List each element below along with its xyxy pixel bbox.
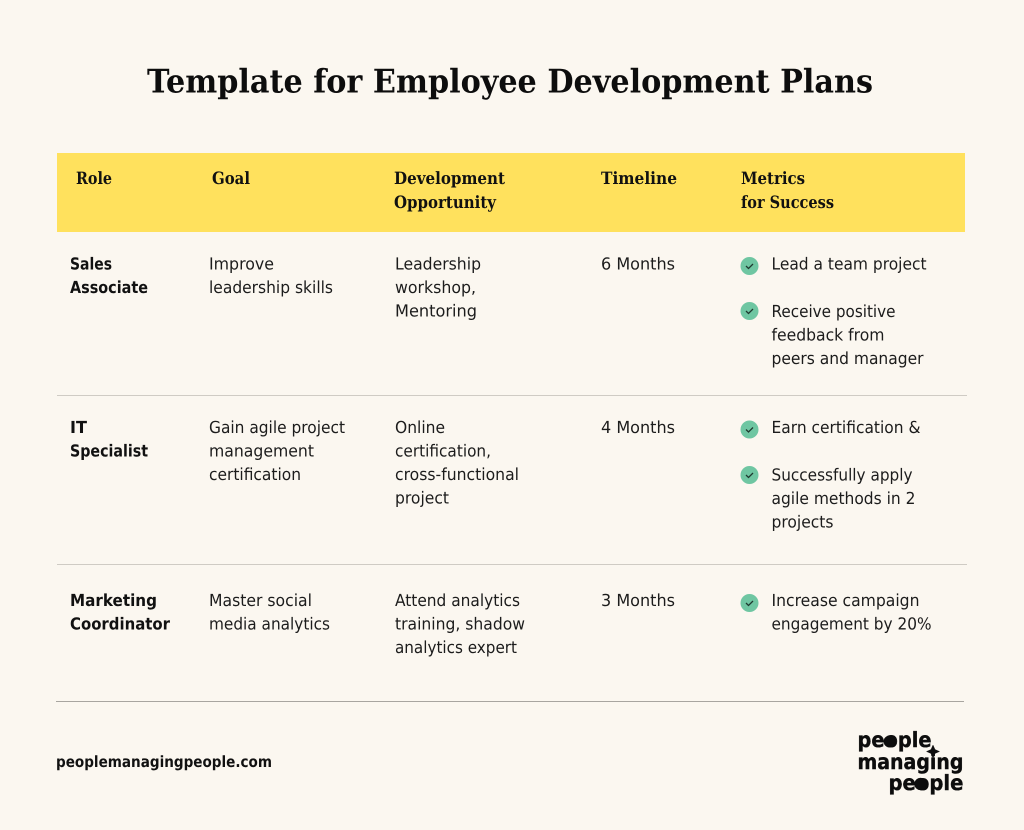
table header band: Timeline — [601, 169, 677, 189]
row: IT Specialist: 4 Months — [601, 418, 675, 437]
row: IT Specialist: Online — [395, 418, 445, 437]
row: IT Specialist: projects — [772, 512, 834, 532]
row: Sales Associate: feedback from — [772, 326, 884, 344]
title: Template for Employee Development Plans — [147, 62, 873, 100]
row: Sales Associate: 6 Months — [601, 254, 675, 274]
row: Marketing Coordinator: Master social — [209, 591, 312, 610]
row: IT Specialist: cross-functional — [395, 465, 519, 484]
row: Sales Associate: Lead a team project — [772, 254, 927, 274]
icon: check — [740, 302, 758, 320]
row: Sales Associate: Associate — [70, 278, 148, 297]
logo: people — [888, 771, 964, 795]
row: IT Specialist: Successfully apply — [772, 466, 913, 484]
row: Sales Associate: Improve — [209, 254, 274, 274]
row: Marketing Coordinator: engagement by 20% — [772, 614, 932, 634]
row: Marketing Coordinator: Coordinator — [70, 614, 171, 634]
row: IT Specialist: management — [209, 442, 314, 460]
table header band: Goal — [212, 169, 250, 189]
row: Sales Associate: workshop, — [395, 278, 476, 297]
row: IT Specialist: agile methods in 2 — [772, 489, 916, 508]
row: Marketing Coordinator: Marketing — [70, 591, 157, 610]
row: IT Specialist: certification, — [395, 442, 491, 460]
row: Sales Associate: Leadership — [395, 254, 481, 274]
row: IT Specialist: certification — [209, 465, 301, 484]
row: IT Specialist: IT — [70, 418, 88, 437]
row: Marketing Coordinator — [70, 591, 932, 657]
table header band: Opportunity — [394, 193, 497, 213]
row: Sales Associate: leadership skills — [209, 278, 333, 297]
logo — [858, 728, 964, 795]
row: Marketing Coordinator: media analytics — [209, 614, 330, 634]
icon: check — [740, 594, 758, 612]
row: Sales Associate: Receive positive — [772, 302, 896, 321]
logo: managing — [858, 750, 964, 774]
row: Marketing Coordinator: analytics expert — [395, 638, 517, 657]
row: IT Specialist: Earn certification & — [772, 418, 921, 437]
row: Sales Associate: Sales — [70, 254, 112, 274]
icon: check — [740, 257, 758, 275]
row: Marketing Coordinator: Attend analytics — [395, 591, 520, 610]
row: Sales Associate: peers and manager — [772, 349, 924, 368]
table header band: Metrics — [741, 169, 805, 189]
row: Marketing Coordinator: training, shadow — [395, 614, 525, 634]
table header band: for Success — [741, 193, 834, 213]
table header band: Role — [76, 169, 112, 189]
row: IT Specialist: Gain agile project — [209, 418, 345, 437]
row: Marketing Coordinator: Increase campaign — [772, 591, 920, 610]
icon: check — [740, 466, 758, 484]
row: Sales Associate: Mentoring — [395, 302, 477, 320]
row: IT Specialist: Specialist — [70, 442, 148, 460]
logo: people — [858, 728, 932, 752]
row: IT Specialist — [70, 418, 921, 532]
table header band — [57, 153, 965, 232]
icon: check — [740, 420, 758, 438]
row: Marketing Coordinator: 3 Months — [601, 591, 675, 610]
footer url: peoplemanagingpeople.com — [56, 753, 272, 771]
row: IT Specialist: project — [395, 488, 449, 508]
table header band: Development — [394, 169, 505, 189]
row: Sales Associate — [70, 254, 927, 368]
